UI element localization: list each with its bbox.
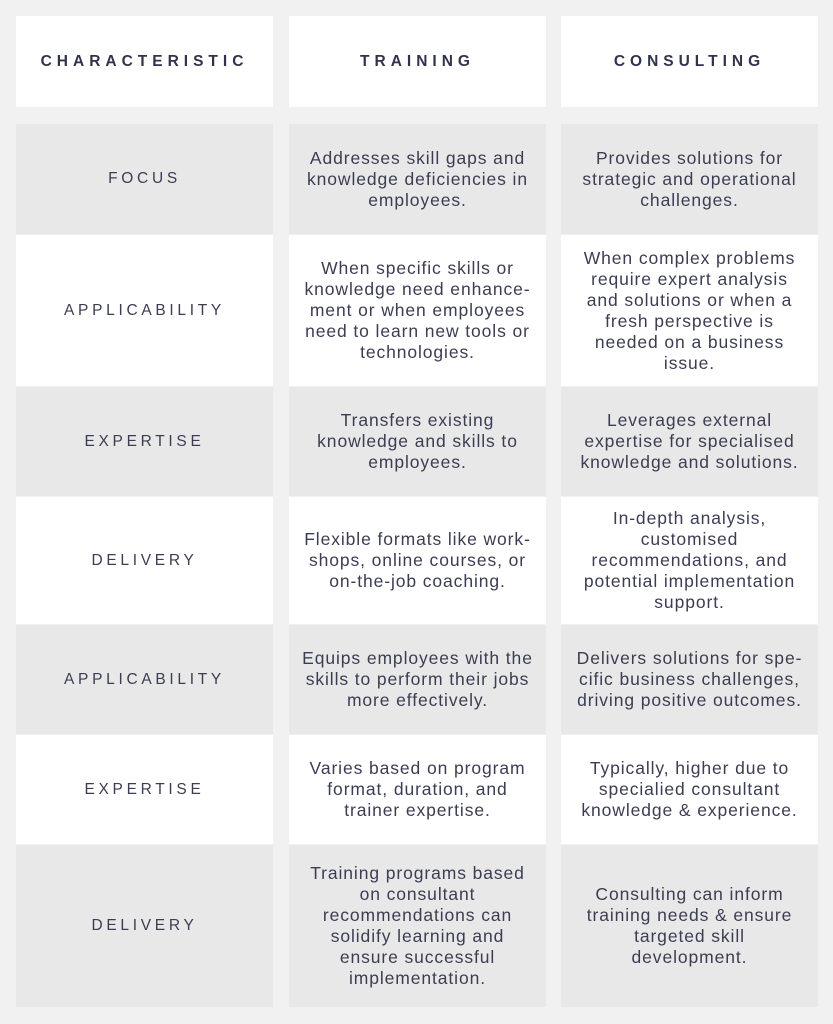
header: characteristic: CHARACTERISTIC xyxy=(41,52,248,70)
row 3 label xyxy=(16,387,273,496)
row 4 training: on-the-job coaching. xyxy=(329,571,506,591)
row 1 training: employees. xyxy=(368,190,467,210)
row 2 consulting: require expert analysis xyxy=(591,268,788,288)
row 7 training: on consultant xyxy=(360,884,475,904)
header: training: TRAINING xyxy=(360,52,475,70)
row 7 consulting: training needs & ensure xyxy=(587,905,792,925)
row 7 consulting: Consulting can inform xyxy=(595,884,784,904)
row 1 training: Addresses skill gaps and xyxy=(310,148,525,168)
row 5 consulting: cific business challenges, xyxy=(579,669,800,689)
row 7 training: Training programs based xyxy=(310,863,525,883)
row 4 label xyxy=(16,497,273,624)
row 6 training: format, duration, and xyxy=(327,779,508,799)
row 6 training xyxy=(289,735,546,844)
row 3 label: EXPERTISE xyxy=(84,432,205,450)
row 1 label xyxy=(16,124,273,234)
header: characteristic xyxy=(16,16,273,107)
row 1 consulting xyxy=(561,124,818,234)
row 5 training: more effectively. xyxy=(347,690,488,710)
row 6 consulting: specialied consultant xyxy=(599,779,780,799)
row 4 training: Flexible formats like work- xyxy=(304,529,531,549)
row 4 consulting: potential implementation xyxy=(584,571,795,591)
row 3 training xyxy=(289,387,546,496)
row 1 consulting: strategic and operational xyxy=(582,168,797,188)
row 7 training: implementation. xyxy=(349,968,486,988)
row 2 consulting: needed on a business xyxy=(595,332,784,352)
row 6 consulting: Typically, higher due to xyxy=(590,758,789,778)
row 1 consulting: challenges. xyxy=(640,190,739,210)
row 5 consulting: driving positive outcomes. xyxy=(577,690,802,710)
row 7 label: DELIVERY xyxy=(92,917,198,934)
row 5 label xyxy=(16,625,273,734)
row 2 consulting: fresh perspective is xyxy=(605,310,774,330)
row 5 consulting xyxy=(561,625,818,734)
row 2 training: When specific skills or xyxy=(321,258,514,278)
row 4 training xyxy=(289,497,546,624)
row 2 label xyxy=(16,235,273,386)
row 5 label: APPLICABILITY xyxy=(64,670,225,688)
row 5 consulting: Delivers solutions for spe- xyxy=(577,648,802,668)
row 2 consulting: and solutions or when a xyxy=(587,290,792,310)
header: training xyxy=(289,16,546,107)
row 7 training: solidify learning and xyxy=(331,926,504,946)
row 1 label: FOCUS xyxy=(108,170,181,187)
row 6 label xyxy=(16,735,273,844)
row 2 training: technologies. xyxy=(360,342,475,362)
row 1 consulting: Provides solutions for xyxy=(596,148,783,168)
row 6 training: trainer expertise. xyxy=(344,800,491,820)
row 4 label: DELIVERY xyxy=(92,552,198,568)
row 7 training xyxy=(289,845,546,1007)
row 3 consulting: expertise for specialised xyxy=(584,431,795,451)
row 6 label: EXPERTISE xyxy=(84,780,205,798)
row 5 training: skills to perform their jobs xyxy=(306,669,529,689)
row 7 consulting: targeted skill xyxy=(634,926,745,946)
row 4 consulting xyxy=(561,497,818,624)
row 2 consulting xyxy=(561,235,818,386)
header: consulting: CONSULTING xyxy=(614,52,765,70)
row 4 training: shops, online courses, or xyxy=(309,550,526,570)
row 2 training: ment or when employees xyxy=(310,300,525,320)
row 5 training xyxy=(289,625,546,734)
row 3 consulting: knowledge and solutions. xyxy=(580,452,799,472)
row 6 consulting xyxy=(561,735,818,844)
row 4 consulting: In-depth analysis, xyxy=(613,508,766,528)
row 5 training: Equips employees with the xyxy=(302,648,533,668)
row 2 label: APPLICABILITY xyxy=(64,302,225,318)
row 3 consulting xyxy=(561,387,818,496)
row 7 consulting xyxy=(561,845,818,1007)
row 2 consulting: When complex problems xyxy=(584,248,795,268)
row 3 training: knowledge and skills to xyxy=(317,431,518,451)
row 4 consulting: support. xyxy=(654,592,725,612)
row 7 training: recommendations can xyxy=(323,905,512,925)
row 2 training xyxy=(289,235,546,386)
row 2 training: knowledge need enhance- xyxy=(304,279,530,299)
row 1 training xyxy=(289,124,546,234)
row 3 consulting: Leverages external xyxy=(607,410,772,430)
row 2 training: need to learn new tools or xyxy=(305,321,530,341)
row 3 training: employees. xyxy=(368,452,467,472)
row 7 consulting: development. xyxy=(632,947,747,967)
row 1 training: knowledge deficiencies in xyxy=(307,168,528,188)
row 2 consulting: issue. xyxy=(664,352,715,372)
header: consulting xyxy=(561,16,818,107)
row 7 label xyxy=(16,845,273,1007)
row 4 consulting: customised xyxy=(641,529,738,549)
row 6 training: Varies based on program xyxy=(310,758,525,778)
row 3 training: Transfers existing xyxy=(341,410,494,430)
row 7 training: ensure successful xyxy=(340,947,495,967)
row 6 consulting: knowledge & experience. xyxy=(581,800,798,820)
row 4 consulting: recommendations, and xyxy=(591,550,788,570)
